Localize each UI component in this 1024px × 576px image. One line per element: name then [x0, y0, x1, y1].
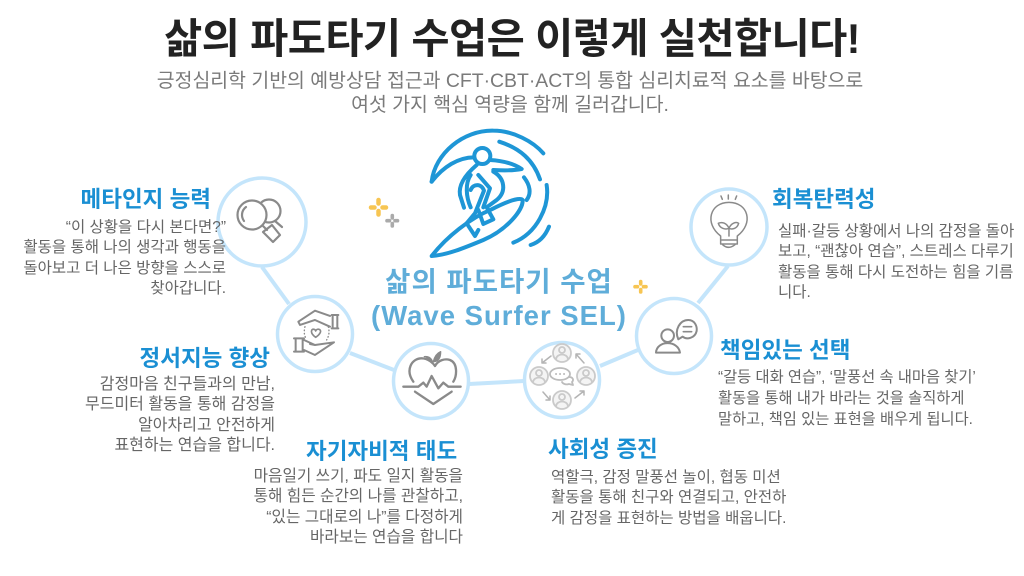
text block: 돌아보고 더 나은 방향을 스스로 [23, 260, 226, 277]
panel: resilience [772, 187, 1014, 301]
heading: 회복탄력성 [772, 187, 876, 212]
text block: 활동을 통해 내가 바라는 것을 솔직하게 [718, 390, 964, 407]
subtitle: 여섯 가지 핵심 역량을 함께 길러갑니다. [351, 94, 669, 116]
text block [778, 223, 1014, 301]
text block: 역할극, 감정 말풍선 놀이, 협동 미션 [551, 469, 781, 486]
text block: 마음일기 쓰기, 파도 일지 활동을 [254, 468, 463, 485]
icon: sparkles [371, 200, 646, 292]
text block [718, 369, 976, 428]
text block: 표현하는 연습을 합니다. [114, 437, 275, 454]
center heading: (Wave Surfer SEL) [371, 300, 627, 331]
connector lines [262, 266, 728, 384]
text block: “이 상황을 다시 본다면?” [66, 219, 226, 236]
circle nodes [218, 178, 767, 418]
text block: 보고, “괜찮아 연습”, 스트레스 다루기 [778, 243, 1014, 260]
heading: 자기자비적 태도 [306, 439, 457, 464]
text block: 게 감정을 표현하는 방법을 배웁니다. [551, 510, 786, 527]
text block: 바라보는 연습을 합니다 [310, 529, 463, 546]
icon: heart with pulse [403, 352, 461, 404]
icon: person and speech bubble [656, 320, 697, 353]
text block: 알아차리고 안전하게 [138, 417, 275, 434]
icon: people in conversation circle [530, 344, 595, 409]
text block: 실패·갈등 상황에서 나의 감정을 돌아 [778, 223, 1014, 240]
panel: social [548, 437, 786, 527]
panel: responsible choice [718, 338, 976, 428]
panel: emotional intelligence [85, 346, 275, 454]
text block: 활동을 통해 다시 도전하는 힘을 기름 [778, 264, 1013, 281]
text block [551, 469, 786, 527]
heading: 책임있는 선택 [720, 338, 850, 363]
icon: hands and heart [294, 311, 338, 355]
icon: surfer logo [432, 131, 549, 256]
icon: lightbulb with sprout [711, 195, 747, 247]
text block [85, 376, 275, 454]
text block: “갈등 대화 연습”, ‘말풍선 속 내마음 찾기’ [718, 369, 976, 386]
heading: 정서지능 향상 [140, 346, 270, 371]
heading: 사회성 증진 [548, 437, 658, 462]
subtitle: 긍정심리학 기반의 예방상담 접근과 CFT·CBT·ACT의 통합 심리치료적 요소를 바탕으로 [157, 70, 863, 92]
text block: 찾아갑니다. [150, 280, 226, 297]
subtitle [157, 70, 863, 116]
text block: “있는 그대로의 나”를 다정하게 [266, 509, 463, 526]
text block [254, 467, 463, 546]
text block [23, 219, 226, 297]
center heading [371, 266, 627, 331]
panel: metacognition [23, 187, 226, 297]
text block: 통해 힘든 순간의 나를 관찰하고, [254, 488, 463, 505]
heading: 메타인지 능력 [81, 187, 211, 212]
text block: 감정마음 친구들과의 만남, [100, 376, 275, 393]
text block: 니다. [778, 284, 811, 301]
icon: magnifying glasses [238, 200, 282, 242]
text block: 활동을 통해 나의 생각과 행동을 [23, 239, 226, 256]
panel: self-compassion [254, 439, 463, 546]
center heading: 삶의 파도타기 수업 [385, 266, 613, 297]
title: 삶의 파도타기 수업은 이렇게 실천합니다! [164, 15, 860, 62]
text block: 활동을 통해 친구와 연결되고, 안전하 [551, 489, 786, 506]
text block: 무드미터 활동을 통해 감정을 [85, 396, 275, 413]
text block: 말하고, 책임 있는 표현을 배우게 됩니다. [718, 411, 973, 428]
